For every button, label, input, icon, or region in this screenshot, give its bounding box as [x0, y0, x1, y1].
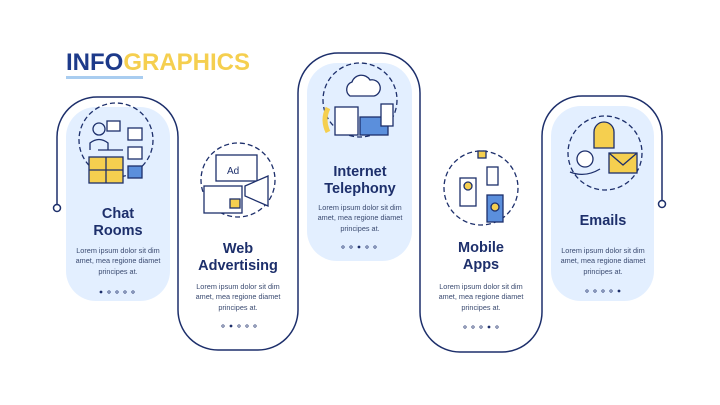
icon: mobile apps [444, 151, 518, 225]
serpentine outline [54, 53, 666, 352]
heading: mobile apps: Apps [463, 257, 499, 273]
heading: chat rooms: Chat [102, 206, 134, 222]
text: emails: Lorem ipsum dolor sit dim amet, mea regione diamet principes at. [561, 246, 645, 276]
icon: internet telephony [323, 63, 397, 137]
title: INFOGRAPHICS [66, 49, 250, 76]
icon: emails [568, 116, 642, 190]
dots [100, 246, 620, 328]
heading: mobile apps [458, 240, 504, 273]
heading: web advertising [198, 241, 278, 274]
icon: web advertising [201, 143, 275, 217]
heading: chat rooms: Rooms [93, 223, 143, 239]
heading: chat rooms [93, 206, 143, 239]
panel fills [66, 63, 654, 301]
heading: internet telephony [324, 164, 396, 197]
text: mobile apps: Lorem ipsum dolor sit dim amet, mea regione diamet principes at. [439, 282, 523, 312]
text: web advertising: Lorem ipsum dolor sit dim amet, mea regione diamet principes at. [196, 282, 280, 312]
heading: web advertising: Advertising [198, 258, 278, 274]
heading: internet telephony: Internet [333, 164, 387, 180]
heading: emails: Emails [580, 213, 626, 229]
icon: web advertising: Ad [227, 166, 239, 177]
text: internet telephony: Lorem ipsum dolor sit dim amet, mea regione diamet principes at. [318, 203, 402, 233]
heading: internet telephony: Telephony [324, 181, 396, 197]
icon: chat rooms [79, 103, 153, 183]
heading: web advertising: Web [223, 241, 253, 257]
text: chat rooms: Lorem ipsum dolor sit dim amet, mea regione diamet principes at. [76, 246, 160, 276]
heading: mobile apps: Mobile [458, 240, 504, 256]
